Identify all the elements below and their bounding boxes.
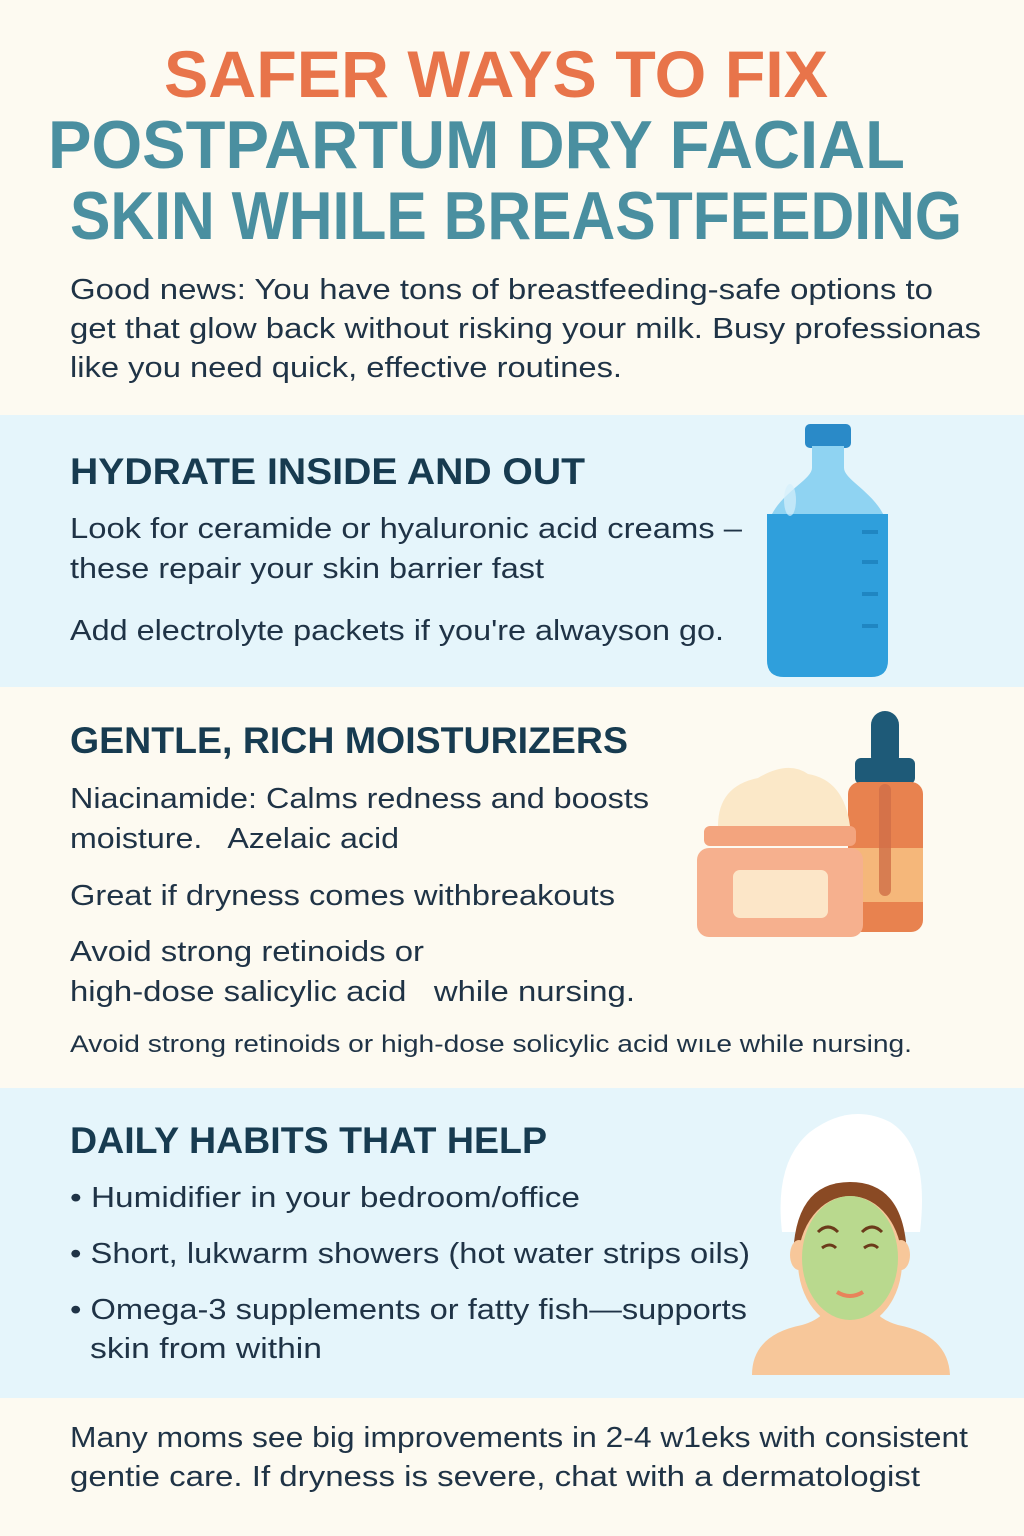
- icon: cream jar: [697, 768, 863, 937]
- title: SAFER WAYS TO FIX: [164, 37, 828, 111]
- text: hydrate: [70, 513, 743, 647]
- heading: daily habits: DAILY HABITS THAT HELP: [70, 1120, 547, 1161]
- panel: moisturizers: [70, 711, 923, 1058]
- text: moisturizers: high-dose salicylic acid while nursing.: [70, 976, 635, 1008]
- text: moisturizers: Avoid strong retinoids or: [70, 936, 424, 968]
- text: moisturizers: Great if dryness comes withbreakouts: [70, 880, 615, 912]
- title: [48, 37, 962, 254]
- icon: serum dropper: [848, 711, 923, 932]
- text: hydrate: these repair your skin barrier fast: [70, 553, 544, 585]
- intro text: like you need quick, effective routines.: [70, 352, 622, 384]
- intro text: get that glow back without risking your milk. Busy professionas: [70, 313, 981, 345]
- bullet list: • Omega-3 supplements or fatty fish—supports: [70, 1294, 747, 1326]
- panel: hydrate: [70, 424, 888, 677]
- text: moisturizers: Avoid strong retinoids or high-dose solicylic acid wıʟe while nursing.: [70, 1031, 912, 1058]
- bullet list: skin from within: [90, 1333, 322, 1365]
- text: hydrate: Look for ceramide or hyaluronic acid creams –: [70, 513, 743, 545]
- icon: water bottle: [767, 424, 888, 677]
- text: moisturizers: moisture. Azelaic acid: [70, 823, 399, 855]
- title: POSTPARTUM DRY FACIAL: [48, 107, 905, 183]
- heading: moisturizers: GENTLE, RICH MOISTURIZERS: [70, 720, 628, 761]
- text: moisturizers: Niacinamide: Calms redness and boosts: [70, 783, 649, 815]
- intro text: [70, 274, 981, 384]
- panel: daily habits: [70, 1114, 950, 1375]
- bullet list: • Short, lukwarm showers (hot water strips oils): [70, 1238, 750, 1270]
- footer text: [70, 1422, 968, 1493]
- intro text: Good news: You have tons of breastfeeding-safe options to: [70, 274, 933, 306]
- bullet list: [70, 1182, 750, 1365]
- text: moisturizers: [70, 783, 912, 1058]
- text: hydrate: Add electrolyte packets if you're alwayson go.: [70, 615, 724, 647]
- heading: hydrate: HYDRATE INSIDE AND OUT: [70, 451, 585, 492]
- icon: woman with face mask: [752, 1114, 950, 1375]
- bullet list: • Humidifier in your bedroom/office: [70, 1182, 580, 1214]
- footer text: gentie care. If dryness is severe, chat with a dermatologist: [70, 1461, 920, 1493]
- footer text: Many moms see big improvements in 2-4 w1eks with consistent: [70, 1422, 968, 1454]
